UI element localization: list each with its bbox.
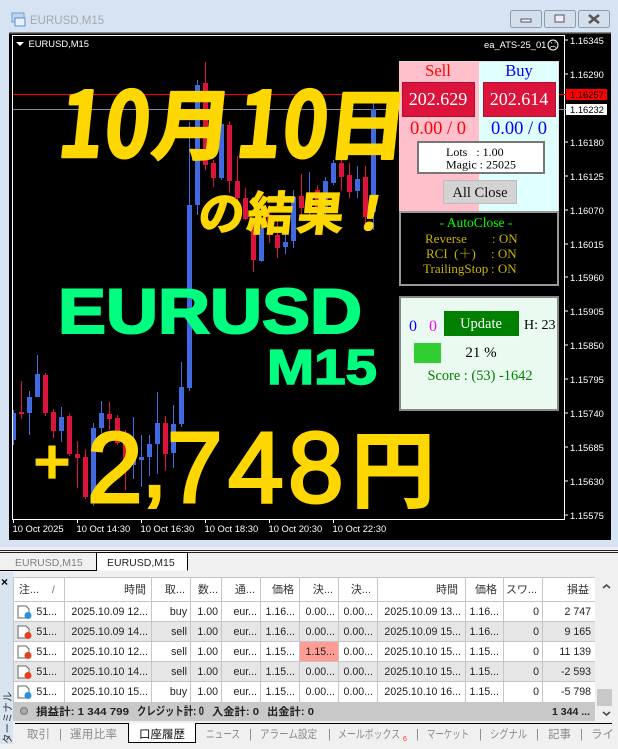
headline: date: 日: [323, 65, 414, 175]
row 5: 1.15...: [266, 686, 295, 698]
row 1: 1.16...: [266, 606, 295, 618]
lots and magic box: Magic : 25025: [446, 158, 516, 172]
row 2: 2025.10.09 14...: [71, 626, 148, 638]
row 2: 0.00...: [344, 626, 373, 638]
table header: 価格: [272, 582, 294, 596]
EA name: ea_ATS-25_01: [484, 39, 546, 50]
bottom tabs: |: [536, 729, 539, 741]
headline: result: の: [196, 178, 248, 244]
row 4: 1.00: [197, 666, 218, 678]
table header: スワ...: [506, 584, 537, 596]
all close button: [443, 180, 517, 204]
row 2: 2025.10.09 15...: [384, 626, 461, 638]
row 5: buy: [170, 686, 188, 698]
table header: 時間: [436, 583, 458, 596]
row 5: 0.00...: [306, 686, 335, 698]
bottom tabs: メールボックス: [338, 728, 400, 741]
bottom tabs: |: [249, 729, 252, 741]
buy label: Buy: [505, 61, 533, 80]
row 2: 9 165: [564, 626, 591, 638]
candlesticks: [13, 62, 376, 506]
side strip: ターミナル: [2, 692, 14, 744]
headline: profit: ＋: [31, 440, 73, 487]
panel: update and score: Score : (53) -1642: [427, 368, 533, 384]
panel: auto close: - AutoClose -: [440, 215, 513, 230]
row 4: 1.15...: [470, 666, 499, 678]
chart tabs: EURUSD,M15: [107, 557, 175, 569]
row 5: 51...: [36, 686, 57, 698]
lots and magic box: [418, 142, 544, 173]
chart tabs: [0, 552, 188, 570]
row 3: 2025.10.10 15...: [384, 646, 461, 658]
row 1: 0: [533, 606, 539, 618]
price axis: 1.15795: [570, 374, 604, 385]
row 3: 2025.10.10 12...: [71, 646, 148, 658]
row 3: 11 139: [559, 646, 591, 658]
price axis: 1.16070: [570, 205, 604, 216]
table header: 時間: [124, 583, 146, 596]
bottom tabs: |: [479, 729, 482, 741]
update button: [444, 311, 519, 336]
headline: result: [196, 177, 400, 244]
row 4: 0.00...: [344, 666, 373, 678]
row 5: 1.15...: [470, 686, 499, 698]
row 3: 0: [533, 646, 539, 658]
row 4: 0.00...: [306, 666, 335, 678]
row 1: 1.16...: [470, 606, 499, 618]
chart tabs: EURUSD,M15: [15, 557, 83, 569]
table header: /: [52, 585, 55, 596]
price tag: bid: 1.16232: [570, 104, 604, 115]
buy price button: 202.614: [490, 89, 548, 109]
scrollbar: [596, 577, 612, 721]
panel: auto close: : ON: [492, 231, 518, 246]
row 4: 1.15...: [266, 666, 295, 678]
row 1: 2025.10.09 12...: [71, 606, 148, 618]
row 2: [36, 626, 591, 638]
chart frame: [12, 36, 564, 520]
row 5: -5 798: [561, 686, 591, 698]
price axis: 1.15740: [570, 408, 604, 419]
row 3: eur...: [233, 646, 257, 658]
row 2: 1.00: [197, 626, 218, 638]
row 1: [36, 606, 591, 618]
headline: date: 0: [277, 54, 336, 184]
row 4: 2025.10.10 15...: [384, 666, 461, 678]
summary bar: [13, 702, 595, 721]
bottom tabs: ライ: [591, 729, 614, 741]
row 4: 2025.10.10 14...: [71, 666, 148, 678]
time axis: 10 Oct 14:30: [76, 523, 130, 534]
bottom tabs: 口座履歴: [139, 728, 185, 741]
panel: auto close: : ON: [491, 261, 517, 276]
window title: EURUSD,M15: [30, 15, 104, 27]
panel: auto close: : ON: [491, 246, 517, 261]
summary bar: クレジット計: 0: [137, 704, 204, 718]
bottom tabs: 運用比率: [70, 728, 117, 741]
lots and magic box: Lots : 1.00: [446, 145, 504, 159]
bottom tabs: |: [580, 729, 583, 741]
headline: profit: 7: [167, 412, 223, 524]
bottom tabs: 6: [403, 736, 407, 743]
bottom tabs: アラーム設定: [260, 728, 317, 741]
summary bar: 1 344 ...: [552, 706, 590, 718]
panel: auto close: [400, 212, 558, 285]
row 5: eur...: [233, 686, 257, 698]
bottom tabs: |: [416, 729, 419, 741]
time axis: 10 Oct 18:30: [204, 523, 258, 534]
headline: date: 1: [231, 54, 290, 184]
row 1: 0.00...: [306, 606, 335, 618]
price lines: [13, 94, 566, 110]
price axis: 1.16290: [570, 69, 604, 80]
row 3: 51...: [36, 646, 57, 658]
headline: date: 1: [53, 54, 112, 184]
time axis: 10 Oct 16:30: [140, 523, 194, 534]
row 2: 1.16...: [470, 626, 499, 638]
panel: auto close: TrailingStop: [423, 261, 488, 276]
headline: date: [53, 54, 414, 184]
time axis: 10 Oct 20:30: [268, 523, 322, 534]
headline: symbol: EURUSD: [58, 277, 362, 347]
price axis: 1.16125: [570, 171, 604, 182]
row 4: eur...: [233, 666, 257, 678]
price tag: ask: 1.16257: [570, 89, 604, 100]
panel: update and score: 21 %: [465, 345, 497, 361]
headline: profit: 円: [351, 425, 435, 519]
row 3: sell: [171, 646, 187, 658]
terminal panel: [0, 547, 618, 749]
row 3: 1.15...: [470, 646, 499, 658]
row 5: 0: [533, 686, 539, 698]
panel: sell and buy: [399, 61, 559, 211]
headline: date: 月: [148, 65, 239, 175]
panel: update and score: 0: [409, 318, 417, 335]
summary bar: 損益計: 1 344 799: [36, 705, 129, 718]
row 4: 0: [533, 666, 539, 678]
all close button: All Close: [452, 185, 508, 201]
table header: 決...: [313, 583, 333, 596]
price axis: [565, 35, 607, 521]
price axis: 1.15575: [570, 510, 604, 521]
bottom tabs: 取引: [27, 727, 50, 741]
row 3: 1.15...: [266, 646, 295, 658]
bottom tabs: |: [59, 729, 62, 741]
time axis: 10 Oct 22:30: [332, 523, 386, 534]
row 1: buy: [170, 606, 188, 618]
progress block: [414, 343, 441, 363]
row 1: eur...: [233, 606, 257, 618]
headline: profit: 4: [228, 412, 284, 524]
row 5: 1.00: [197, 686, 218, 698]
icon: chart window: [12, 13, 25, 26]
row 1: 0.00...: [344, 606, 373, 618]
table header: 取...: [165, 584, 185, 596]
row 5: 0.00...: [344, 686, 373, 698]
panel: update and score: [400, 297, 558, 410]
sell price button: [402, 82, 475, 117]
title bar: [12, 10, 610, 28]
row 2: 0: [533, 626, 539, 638]
summary bar: 入金計: 0: [212, 705, 259, 718]
row 4: [36, 666, 591, 678]
price axis: 1.16180: [570, 137, 604, 148]
table header: 注...: [19, 583, 39, 596]
headline: result: 果: [295, 178, 347, 244]
row 2: sell: [171, 626, 187, 638]
panel: update and score: 0: [429, 318, 437, 335]
row 3: [36, 646, 591, 658]
buy price button: [483, 82, 556, 117]
bottom tabs: 記事: [548, 728, 571, 741]
table header: 損益: [567, 582, 589, 596]
bottom tabs: マーケット: [427, 728, 469, 741]
table header: 価格: [475, 582, 497, 596]
row 3: 1.00: [197, 646, 218, 658]
headline: profit: ,: [142, 416, 167, 516]
sell label: Sell: [425, 61, 451, 80]
table: [13, 577, 595, 702]
time axis: [12, 520, 386, 534]
row 4: -2 593: [561, 666, 591, 678]
side strip: ×: [1, 575, 8, 589]
table header: 決...: [351, 583, 371, 596]
headline: profit: 8: [288, 412, 344, 524]
headline: timeframe: M15: [267, 341, 377, 395]
sell price button: 202.629: [409, 89, 467, 109]
price axis: 1.15850: [570, 340, 604, 351]
update button: Update: [460, 316, 502, 332]
row 1: 2 747: [564, 606, 591, 618]
row 1: 1.00: [197, 606, 218, 618]
window buttons: [510, 10, 610, 28]
panel: update and score: H: 23: [524, 318, 556, 333]
price axis: 1.16345: [570, 35, 604, 46]
headline: date: 0: [99, 54, 158, 184]
row 5: [36, 686, 591, 698]
headline: profit: [31, 412, 435, 524]
headline: profit: 2: [87, 412, 143, 524]
chart window: [9, 32, 611, 540]
headline: result: 結: [245, 178, 297, 244]
row 4: sell: [171, 666, 187, 678]
row 1: 51...: [36, 606, 57, 618]
table header: [19, 582, 589, 596]
bottom tabs: シグナル: [490, 727, 527, 741]
time axis: 10 Oct 2025: [12, 523, 64, 534]
buy position: 0.00 / 0: [491, 119, 547, 139]
bottom tabs: ニュース: [206, 729, 240, 741]
summary bar: 出金計: 0: [267, 705, 314, 718]
side strip: [0, 572, 14, 744]
price axis: 1.15960: [570, 272, 604, 283]
row 2: eur...: [233, 626, 257, 638]
bottom tabs: [15, 724, 614, 743]
panel: auto close: RCI (＋): [426, 246, 476, 261]
row 2: 51...: [36, 626, 57, 638]
row icons: [18, 606, 32, 699]
panel: auto close: Reverse: [425, 231, 467, 246]
row 4: 51...: [36, 666, 57, 678]
row 1: 2025.10.09 13...: [384, 606, 461, 618]
price axis: 1.15685: [570, 442, 604, 453]
table header: 通...: [235, 583, 255, 596]
row 3: 0.00...: [344, 646, 373, 658]
row 5: 2025.10.10 16...: [384, 686, 461, 698]
bottom tabs: |: [328, 729, 331, 741]
table header: 数...: [198, 583, 218, 596]
symbol label: EURUSD,M15: [28, 38, 89, 49]
row 2: 1.16...: [266, 626, 295, 638]
price axis: 1.16015: [570, 239, 604, 250]
row 3: 1.15...: [306, 646, 335, 658]
price axis: 1.15905: [570, 306, 604, 317]
row 2: 0.00...: [306, 626, 335, 638]
price axis: 1.15630: [570, 476, 604, 487]
row 5: 2025.10.10 15...: [71, 686, 148, 698]
sell position: 0.00 / 0: [410, 119, 466, 139]
headline: result: ！: [343, 177, 400, 244]
